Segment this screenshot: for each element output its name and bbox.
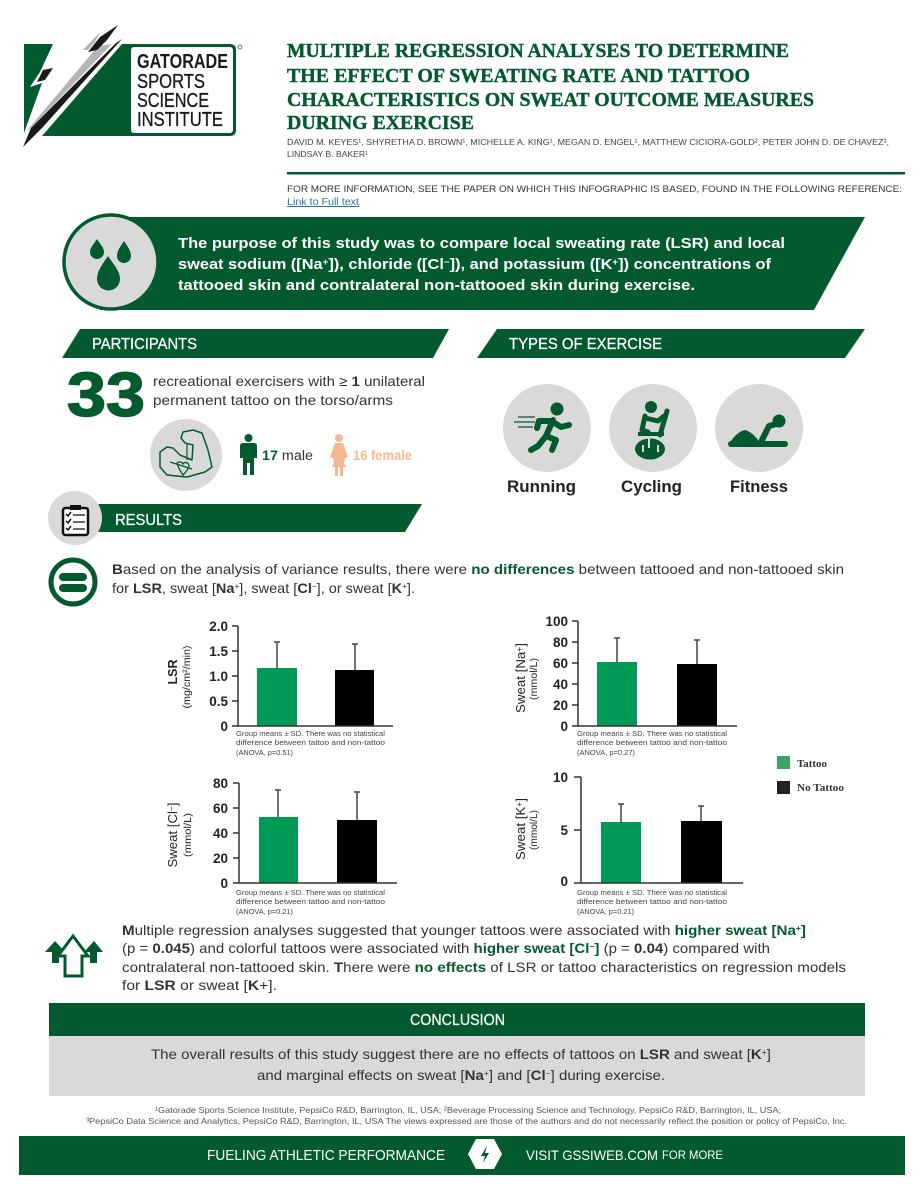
- chart: sweat sodium: ]: [514, 643, 528, 647]
- text: ANOVA result: Cl: [297, 580, 312, 596]
- logo: Gatorade Sports Science Institute: INSTITUTE: [137, 109, 223, 131]
- icon: hexagon bolt: [468, 1139, 502, 1169]
- chart: sweat potassium: 5: [560, 823, 568, 838]
- footer bar: FOR MORE: [662, 1150, 723, 1162]
- chart: sweat potassium: difference between tattoo and non-tattoo: [577, 897, 727, 906]
- title: CHARACTERISTICS ON SWEAT OUTCOME MEASURES: [287, 90, 814, 111]
- chart: sweat potassium: Sweat [K: [514, 810, 528, 860]
- text: ANOVA result: for LSR, sweat [Na: [112, 580, 234, 596]
- chart: sweat sodium: (mmol/L): [529, 658, 540, 700]
- title: THE EFFECT OF SWEATING RATE AND TATTOO: [287, 66, 750, 87]
- chart: sweat sodium: (ANOVA, p=0.27): [577, 748, 635, 757]
- text: ANOVA result: +: [234, 582, 240, 591]
- panel: conclusion: The overall results of this study suggest there are no effects of tattoos on LSR and sweat [ K: [151, 1046, 761, 1062]
- chart: sweat potassium: 10: [553, 770, 568, 785]
- label: 16 female: 16 female: [353, 448, 412, 463]
- panel: conclusion: Cl: [531, 1067, 546, 1083]
- reference note: [287, 184, 902, 208]
- participants count: recreational exercisers with ≥ 1 unilateral: [153, 373, 425, 389]
- chart: LSR: Group means ± SD. There was no statistical: [236, 729, 385, 738]
- title: MULTIPLE REGRESSION ANALYSES TO DETERMINE: [287, 41, 789, 62]
- footnotes: [86, 1105, 847, 1126]
- chart: sweat chloride: −: [167, 806, 176, 811]
- chart: sweat potassium: Group means ± SD. There was no statistical: [577, 888, 727, 897]
- text: regression findings: (p = 0.045) and colorful tattoos were associated with higher sweat [Cl: [122, 940, 582, 956]
- panel: study purpose banner: sweat sodium ([Na: [178, 256, 311, 273]
- text: ANOVA result: ], sweat [: [239, 580, 297, 596]
- title: [287, 41, 814, 134]
- text: regression findings: −: [589, 942, 595, 951]
- panel: conclusion: +: [484, 1069, 489, 1078]
- text: regression findings: ]: [594, 940, 599, 956]
- chart: sweat potassium: [514, 770, 743, 916]
- text: ANOVA result: ].: [407, 580, 415, 596]
- footnotes: ³PepsiCo Data Science and Analytics, PepsiCo R&D, Barrington, IL, USA The views expressed are those of the authors and do not necessarily reflect the position or policy of PepsiCo, Inc.: [86, 1116, 847, 1126]
- icon: running: [503, 384, 591, 472]
- chart: LSR: 0.5: [209, 694, 228, 709]
- panel: study purpose banner: tattooed skin and contralateral non-tattooed skin during exercise.: [178, 277, 695, 294]
- icon: fitness: [715, 384, 803, 472]
- panel: study purpose banner: ]), and potassium ([K: [450, 256, 613, 273]
- text: regression findings: contralateral non-tattooed skin. There were no effects of LSR or tattoo characteristics on regression models: [122, 959, 846, 975]
- heading: types of exercise: TYPES OF EXERCISE: [509, 336, 662, 353]
- logo: Gatorade Sports Science Institute: SPORTS: [137, 71, 205, 93]
- chart: LSR: LSR: [166, 660, 180, 684]
- panel: study purpose banner: +: [323, 257, 328, 267]
- title: DURING EXERCISE: [287, 113, 474, 134]
- legend: No Tattoo: [797, 783, 844, 794]
- chart: LSR: 0: [220, 719, 228, 734]
- chart: sweat sodium: 20: [553, 698, 568, 713]
- legend: [777, 756, 844, 794]
- legend: Tattoo: [797, 759, 827, 770]
- text: regression findings: (p = 0.04) compared with: [603, 940, 763, 956]
- panel: study purpose banner: [64, 215, 865, 310]
- chart: sweat chloride: 40: [213, 826, 228, 841]
- participants count: [67, 361, 425, 430]
- chart: sweat chloride: [166, 776, 397, 916]
- text: regression findings: Multiple regression analyses suggested that younger tattoos were associated with higher sweat [Na: [122, 922, 787, 938]
- panel: study purpose banner: −: [444, 257, 450, 267]
- reference note: FOR MORE INFORMATION, SEE THE PAPER ON WHICH THIS INFOGRAPHIC IS BASED, FOUND IN THE FOLLOWING REFERENCE:: [287, 184, 902, 195]
- panel: conclusion: CONCLUSION: [410, 1012, 505, 1029]
- icon: cycling: [609, 384, 697, 472]
- panel: study purpose banner: +: [612, 257, 618, 267]
- chart: sweat sodium: 60: [553, 656, 568, 671]
- icon: sweat drops: [64, 215, 158, 309]
- logo: Gatorade Sports Science Institute: GATORADE: [137, 51, 228, 73]
- panel: conclusion: ] and [: [489, 1067, 531, 1083]
- text: ANOVA result: −: [312, 582, 317, 591]
- chart: sweat sodium: 0: [560, 719, 568, 734]
- chart: LSR: 1.0: [209, 669, 228, 684]
- chart: sweat sodium: difference between tattoo and non-tattoo: [577, 738, 727, 747]
- authors: LINDSAY B. BAKER¹: [287, 149, 368, 159]
- chart: sweat sodium: Group means ± SD. There was no statistical: [577, 729, 727, 738]
- text: regression findings: for LSR or sweat [ K+].: [122, 977, 277, 993]
- chart: sweat potassium: +: [515, 801, 524, 807]
- authors: [287, 137, 889, 159]
- chart: sweat chloride: difference between tattoo and non-tattoo: [236, 897, 385, 906]
- panel: conclusion: ] during exercise.: [551, 1067, 665, 1083]
- panel: conclusion: +: [762, 1048, 767, 1057]
- icon: up arrows: [45, 936, 103, 976]
- text: regression findings: ]: [801, 922, 806, 938]
- heading: results: [48, 491, 422, 545]
- chart: sweat chloride: 80: [213, 776, 228, 791]
- icon: clipboard: [48, 491, 102, 545]
- heading: types of exercise: [477, 329, 865, 358]
- icon: tattooed arm: [150, 419, 222, 491]
- panel: study purpose banner: The purpose of this study was to compare local sweating rate (LSR) and local: [178, 235, 785, 252]
- panel: conclusion: ]: [767, 1046, 771, 1062]
- label: 17 male: 17 male: [262, 448, 313, 463]
- chart: sweat chloride: (ANOVA, p=0.21): [236, 907, 293, 916]
- text: ANOVA result: [112, 561, 844, 596]
- heading: participants: [62, 329, 449, 358]
- icon: female: [330, 434, 348, 476]
- label: running: Running: [507, 478, 576, 496]
- chart: LSR: (ANOVA, p=0.51): [236, 748, 293, 757]
- chart: sweat potassium: 0: [560, 874, 568, 889]
- logo: Gatorade Sports Science Institute: [23, 25, 242, 147]
- chart: LSR: (mg/cm²/min): [182, 646, 193, 708]
- chart: sweat sodium: Sweat [Na: [514, 655, 528, 713]
- chart: sweat sodium: 80: [553, 635, 568, 650]
- label: fitness: Fitness: [730, 478, 788, 496]
- authors: DAVID M. KEYES¹, SHYRETHA D. BROWN¹, MICHELLE A. KING¹, MEGAN D. ENGEL¹, MATTHEW CICIORA-GOLD², PETER JOHN D. DE CHAVEZ³,: [287, 137, 889, 147]
- chart: sweat sodium: 40: [553, 677, 568, 692]
- chart: sweat sodium: [514, 614, 737, 757]
- chart: sweat chloride: 0: [220, 876, 228, 891]
- footer bar: FUELING ATHLETIC PERFORMANCE: [207, 1148, 445, 1164]
- chart: LSR: 1.5: [209, 644, 228, 659]
- chart: sweat sodium: +: [515, 646, 524, 652]
- chart: sweat chloride: 20: [213, 851, 228, 866]
- icon: male: [240, 434, 257, 475]
- text: ANOVA result: K: [392, 580, 402, 596]
- text: ANOVA result: ], or sweat [: [317, 580, 392, 596]
- reference note: Link to Full text: [287, 197, 359, 208]
- panel: conclusion: −: [546, 1069, 551, 1078]
- panel: conclusion: and marginal effects on sweat [ Na: [257, 1067, 483, 1083]
- text: regression findings: [122, 922, 846, 993]
- footnotes: ¹Gatorade Sports Science Institute, PepsiCo R&D, Barrington, IL, USA; ²Beverage Processing Science and Technology, PepsiCo R&D, Barrington, IL, USA;: [155, 1105, 781, 1115]
- icon: equals: [51, 560, 95, 604]
- footer bar: VISIT GSSIWEB.COM: [526, 1147, 658, 1163]
- chart: sweat potassium: (mmol/L): [529, 810, 540, 850]
- text: ANOVA result: +: [402, 582, 407, 591]
- chart: sweat chloride: ]: [166, 802, 180, 806]
- label: cycling: Cycling: [621, 478, 682, 496]
- participants count: permanent tattoo on the torso/arms: [153, 392, 393, 408]
- chart: sweat chloride: (mmol/L): [183, 813, 194, 857]
- participants count: 33: [67, 361, 145, 430]
- panel: study purpose banner: ]), chloride ([Cl: [328, 256, 444, 273]
- chart: sweat potassium: (ANOVA, p=0.21): [577, 907, 634, 916]
- logo: Gatorade Sports Science Institute: SCIENCE: [137, 90, 209, 112]
- panel: study purpose banner: ]) concentrations of: [618, 256, 772, 273]
- heading: participants: PARTICIPANTS: [92, 336, 197, 353]
- chart: sweat chloride: Sweat [Cl: [166, 814, 180, 868]
- text: ANOVA result: Based on the analysis of variance results, there were no differences between tattooed and non-tattooed skin: [112, 561, 844, 577]
- chart: sweat chloride: Group means ± SD. There was no statistical: [236, 888, 385, 897]
- chart: sweat potassium: ]: [514, 798, 528, 802]
- chart: sweat chloride: 60: [213, 801, 228, 816]
- footer bar: [19, 1136, 905, 1175]
- chart: sweat sodium: 100: [545, 614, 568, 629]
- heading: results: RESULTS: [115, 512, 182, 529]
- chart: LSR: 2.0: [209, 619, 228, 634]
- chart: LSR: [166, 619, 393, 757]
- panel: conclusion: [49, 1003, 865, 1096]
- text: regression findings: +: [796, 924, 801, 933]
- chart: LSR: difference between tattoo and non-tattoo: [236, 738, 385, 747]
